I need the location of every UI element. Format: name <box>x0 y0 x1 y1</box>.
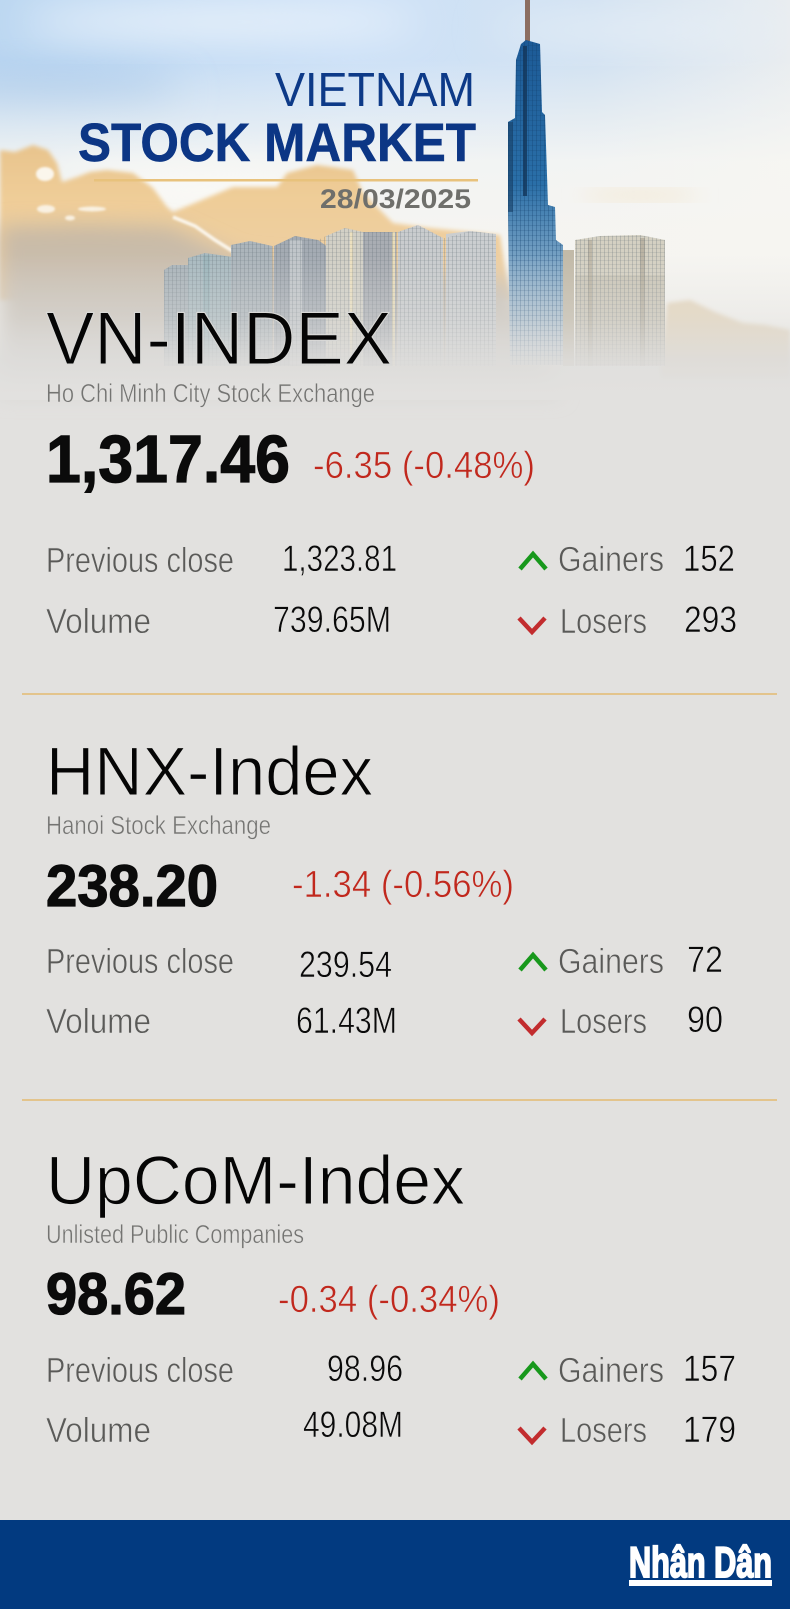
panel: VN-Index <box>46 296 737 641</box>
label: gainers: Gainers <box>558 1351 664 1390</box>
change: -1.34 (-0.56%) <box>292 864 514 906</box>
panel: HNX-Index <box>46 733 723 1041</box>
value: previous close: 98.96 <box>327 1348 403 1389</box>
icon: up chevron <box>520 1364 546 1379</box>
label: volume: Volume <box>46 1411 151 1450</box>
title rule <box>94 179 478 182</box>
icon: up chevron <box>520 955 546 970</box>
label: gainers: Gainers <box>558 942 664 981</box>
value: volume: 61.43M <box>296 1000 397 1041</box>
label: previous close: Previous close <box>46 541 234 580</box>
title line: Vietnam: VIETNAM <box>275 64 475 117</box>
title <box>78 64 476 173</box>
label: previous close: Previous close <box>46 942 234 981</box>
value: previous close: 1,323.81 <box>282 538 397 579</box>
value: volume: 49.08M <box>303 1404 403 1445</box>
icon: down chevron <box>519 618 545 632</box>
footer band <box>0 1520 790 1609</box>
heading: HNX-Index: HNX-Index <box>46 733 373 810</box>
label: losers: Losers <box>560 1411 647 1450</box>
exchange name: Hanoi Stock Exchange <box>46 810 271 840</box>
value: gainers: 72 <box>687 939 723 980</box>
exchange name: Unlisted Public Companies <box>46 1219 304 1249</box>
Landmark 81 tower <box>508 0 563 365</box>
label: volume: Volume <box>46 602 151 641</box>
icon: down chevron <box>519 1019 545 1033</box>
icon: up chevron <box>520 554 546 569</box>
value: volume: 739.65M <box>273 599 391 640</box>
heading: VN-Index: VN-INDEX <box>46 296 392 380</box>
icon: down chevron <box>519 1428 545 1442</box>
value: losers: 179 <box>683 1409 736 1450</box>
index value: 238.20 <box>46 853 218 919</box>
change: -6.35 (-0.48%) <box>313 445 535 487</box>
panel: UpCoM-Index <box>46 1142 736 1450</box>
value: losers: 90 <box>687 999 723 1040</box>
title line: Stock Market: STOCK MARKET <box>78 113 476 173</box>
value: gainers: 152 <box>683 538 735 579</box>
index value: 98.62 <box>46 1261 186 1327</box>
label: losers: Losers <box>560 1002 647 1041</box>
value: previous close: 239.54 <box>299 944 392 985</box>
exchange name: Ho Chi Minh City Stock Exchange <box>46 378 375 408</box>
index value: 1,317.46 <box>46 422 290 497</box>
label: volume: Volume <box>46 1002 151 1041</box>
heading: UpCoM-Index: UpCoM-Index <box>46 1142 465 1219</box>
value: losers: 293 <box>684 599 737 640</box>
date: 28/03/2025 <box>320 184 471 214</box>
label: losers: Losers <box>560 602 647 641</box>
value: gainers: 157 <box>683 1348 736 1389</box>
label: previous close: Previous close <box>46 1351 234 1390</box>
label: gainers: Gainers <box>558 540 664 579</box>
change: -0.34 (-0.34%) <box>278 1279 500 1321</box>
residential towers <box>164 225 665 366</box>
header photo: skyline and clouds <box>0 0 790 400</box>
